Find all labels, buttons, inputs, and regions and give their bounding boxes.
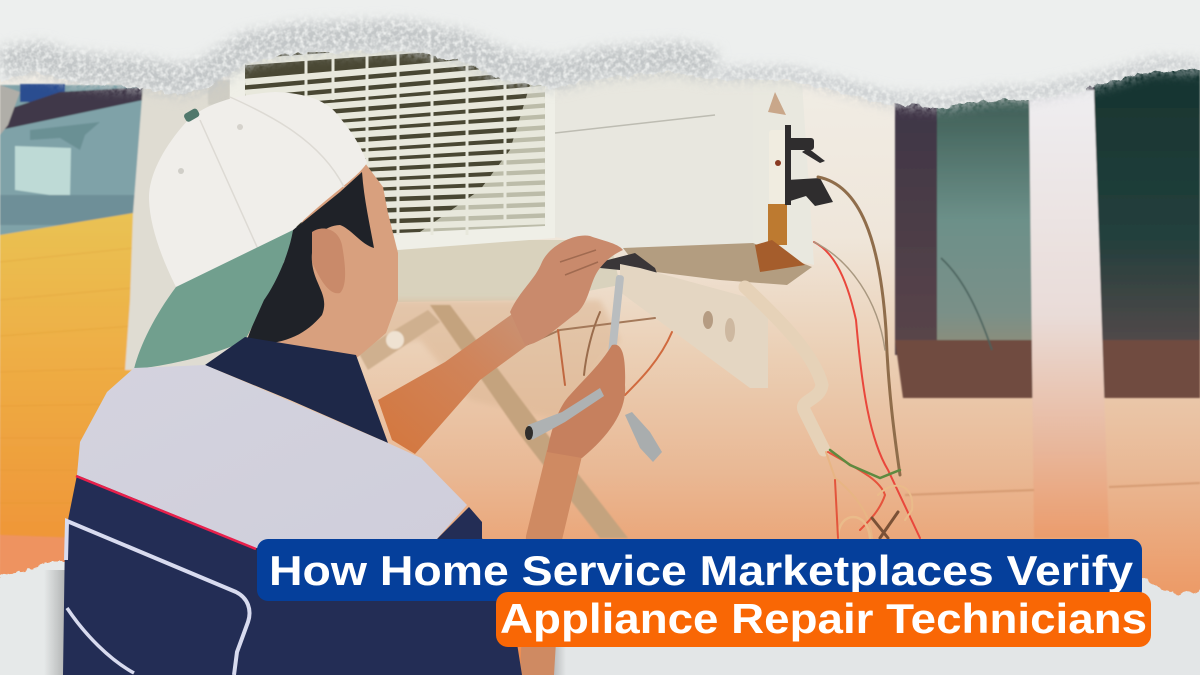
- near hand holding the tool: [547, 345, 625, 458]
- wrench handle: [525, 388, 604, 440]
- torn paper: bottom right: [552, 578, 1200, 675]
- forearm near: [520, 450, 582, 675]
- white piping: [66, 521, 250, 675]
- technician: [63, 92, 662, 675]
- rusty underside: [623, 243, 812, 285]
- title: [257, 539, 1151, 647]
- rust column: [768, 92, 787, 245]
- hair: [245, 172, 374, 345]
- torn paper: top: [0, 0, 1200, 108]
- wall bracket: [620, 264, 768, 388]
- title line 1 pill: [257, 539, 1142, 601]
- grille frame: [230, 50, 555, 250]
- upper hand holding the unit: [510, 236, 623, 345]
- wall shadow below unit: [360, 300, 620, 420]
- title line 2 text: Appliance Repair Technicians: [500, 595, 1147, 642]
- title line 1 text: How Home Service Marketplaces Verify: [269, 547, 1134, 594]
- black clamp: [600, 253, 658, 276]
- main cover: [550, 70, 760, 250]
- shirt collar: [205, 337, 388, 443]
- torn paper: bottom left: [0, 562, 90, 675]
- left building: window, pillar and yellow siding: [0, 80, 230, 590]
- side panel: [753, 78, 814, 265]
- insulated pipe: [745, 287, 824, 450]
- cap crown: [149, 92, 367, 287]
- neck and face: [270, 163, 398, 368]
- support beam: [358, 305, 628, 538]
- far arm reaching up to the unit: [378, 312, 540, 454]
- valve fittings: [785, 125, 833, 206]
- grey yoke: [77, 365, 467, 548]
- red piping: [76, 476, 256, 549]
- title line 2 pill: [496, 592, 1151, 647]
- wrench lower socket: [625, 412, 662, 462]
- shirt body: [63, 475, 522, 675]
- lower housing: [395, 240, 620, 302]
- wires: [526, 177, 920, 538]
- grille slats: [245, 46, 545, 240]
- right window with posts and drain pipe: [895, 60, 1200, 538]
- cap visor: [134, 230, 293, 369]
- air conditioner unit: [230, 46, 833, 302]
- ear: [312, 228, 345, 293]
- wrench rod: [606, 275, 624, 375]
